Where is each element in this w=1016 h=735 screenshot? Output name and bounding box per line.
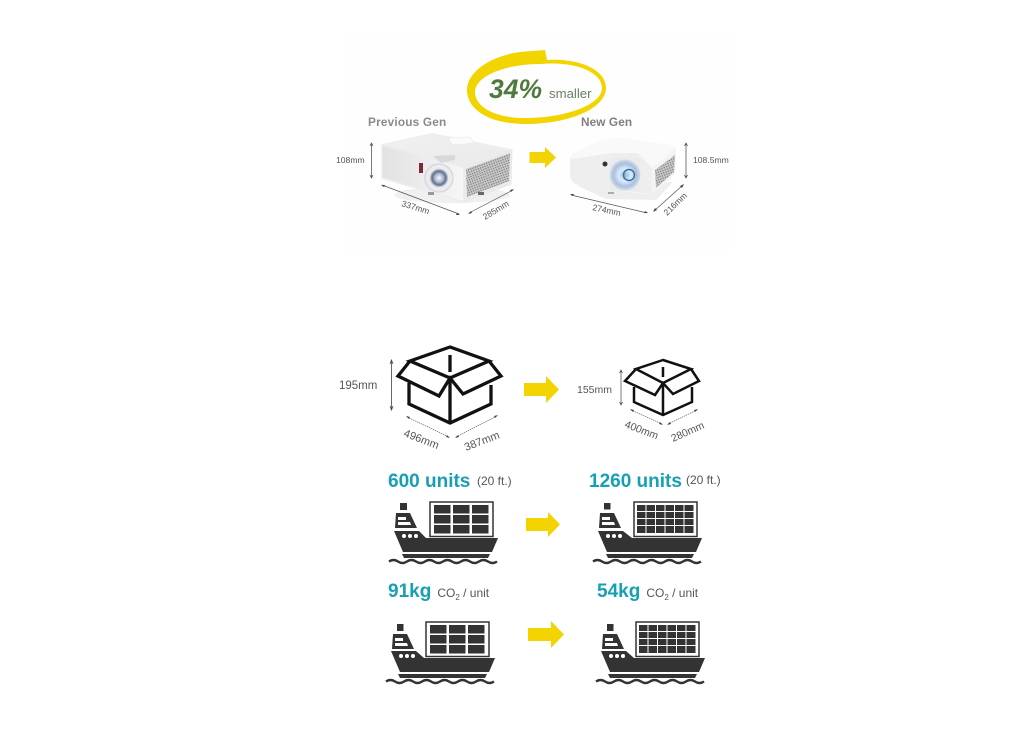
arrow: units comparison [526,512,560,537]
heading: New Gen: New Gen [581,115,632,129]
label: 91kg CO2 per unit: / unit [460,586,490,600]
icon: large carton [398,347,501,423]
label: 1260 units: 1260 units [589,471,682,492]
label: 600 units: (20 ft.) [477,474,512,488]
label: 54kg CO2 per unit: 54kg CO [597,581,664,602]
label: 91kg CO2 per unit: 2 [455,593,460,602]
label: 54kg CO2 per unit: / unit [669,586,699,600]
dimension: 387mm [455,415,501,454]
heading: Previous Gen: Previous Gen [368,115,446,129]
arrow: carton comparison [524,376,559,403]
dimension: 400mm [623,409,663,442]
icon: small carton [625,360,699,415]
dimension: 155mm: 155mm [577,384,612,396]
dimension: 216mm [653,184,689,217]
dimension: 108.5mm: 108.5mm [693,155,729,165]
dimension: 274mm [570,194,648,218]
label: 600 units: 600 units [388,471,470,492]
icon: ship 600 units [389,502,498,563]
dimension: 387mm: 387mm [463,429,501,454]
dimension: 280mm: 280mm [669,419,706,445]
dimension: 108mm [336,143,373,178]
projector: new gen [570,138,676,200]
dimension: 108mm: 108mm [336,155,365,165]
dimension: 195mm [339,360,393,410]
projector: previous gen [382,134,512,203]
dimension: 274mm: 274mm [592,202,622,218]
dimension: 108.5mm [684,143,729,178]
icon: ship 91kg [386,622,495,683]
label: 91kg CO2 per unit: 91kg CO [388,581,455,602]
product image background [345,32,730,254]
dimension: 400mm: 400mm [623,419,660,442]
hand-drawn yellow ellipse [467,50,606,124]
dimension: 280mm [667,409,706,445]
label: 1260 units: (20 ft.) [686,473,721,487]
arrow: projector comparison [530,147,556,168]
34%: 34% [489,74,542,104]
dimension: 285mm [468,189,514,222]
dimension: 155mm [577,370,622,405]
smaller: smaller [549,86,592,101]
dimension: 337mm: 337mm [400,198,431,216]
dimension: 216mm: 216mm [661,190,689,217]
callout: 34% smaller [467,50,606,124]
dimension: 285mm: 285mm [481,198,511,222]
dimension: 195mm: 195mm [339,380,377,392]
icon: ship 54kg [596,622,705,683]
label: 54kg CO2 per unit: 2 [664,593,669,602]
label: 600 units [388,471,512,492]
icon: ship 1260 units [593,502,702,563]
dimension: 496mm [402,416,450,452]
dimension: 496mm: 496mm [402,428,440,452]
dimension: 337mm [381,185,460,216]
arrow: CO2 comparison [528,621,564,648]
